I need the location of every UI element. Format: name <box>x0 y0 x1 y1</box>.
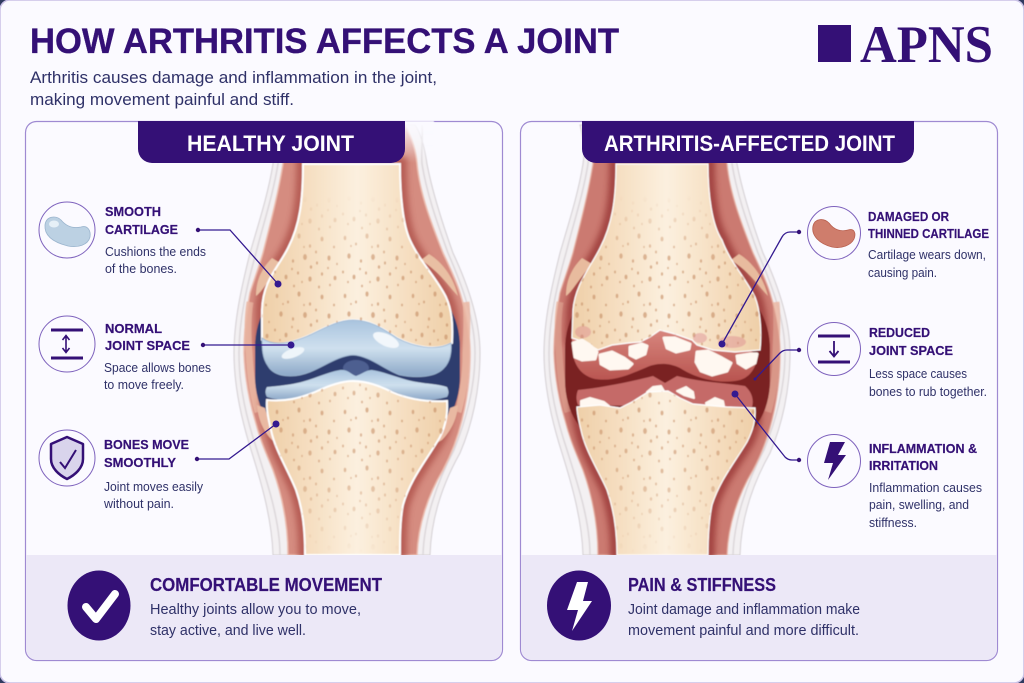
callout: smooth cartilage: SMOOTH <box>105 204 161 219</box>
subtitle: making movement painful and stiff. <box>30 91 294 109</box>
callout: damaged cartilage: Cartilage wears down, <box>868 248 986 262</box>
callout: smooth cartilage: Cushions the ends <box>105 245 206 259</box>
callout: damaged cartilage: THINNED CARTILAGE <box>868 226 989 241</box>
heading tab: arthritis-affected joint: ARTHRITIS-AFFECTED JOINT <box>604 131 895 156</box>
callout: reduced joint space <box>754 322 987 399</box>
callout: damaged cartilage: causing pain. <box>868 266 937 280</box>
callout: damaged cartilage <box>718 206 989 348</box>
callout: normal joint space: NORMAL <box>105 321 162 336</box>
callout text: comfortable movement: COMFORTABLE MOVEMENT <box>150 575 382 595</box>
heading tab: healthy joint: HEALTHY JOINT <box>187 131 354 156</box>
callout: smooth cartilage <box>39 202 282 288</box>
callout text: pain and stiffness: Joint damage and inflammation make <box>628 601 860 618</box>
callout: bones move smoothly: BONES MOVE <box>104 437 189 452</box>
subtitle: Arthritis causes damage and inflammation in the joint, <box>30 69 437 87</box>
callout: smooth cartilage: CARTILAGE <box>105 222 178 237</box>
callout text: comfortable movement <box>150 575 382 639</box>
title: HOW ARTHRITIS AFFECTS A JOINT <box>30 21 619 61</box>
icon: check circle <box>68 570 130 640</box>
callout text: comfortable movement: stay active, and live well. <box>150 622 306 639</box>
callout text: comfortable movement: Healthy joints allow you to move, <box>150 601 361 618</box>
icon: shield check <box>39 430 95 486</box>
illustration: arthritic knee joint <box>544 121 790 555</box>
callout: normal joint space: Space allows bones <box>104 361 211 375</box>
icon: lightning circle <box>547 570 611 640</box>
illustration: healthy knee joint <box>234 121 480 555</box>
heading tab: healthy joint <box>138 121 405 163</box>
icon: reduced space arrow <box>808 322 860 376</box>
logo: APNS: APNS <box>860 16 993 74</box>
callout: bones move smoothly: SMOOTHLY <box>104 455 176 470</box>
callout: inflammation and irritation <box>732 390 982 530</box>
callout: inflammation and irritation: IRRITATION <box>869 458 938 473</box>
bottom band: comfortable movement <box>26 555 502 660</box>
panel: arthritis-affected joint <box>520 121 998 660</box>
callout text: pain and stiffness: movement painful and more difficult. <box>628 622 859 639</box>
callout: reduced joint space: JOINT SPACE <box>869 343 953 358</box>
icon: blue cartilage <box>39 202 95 258</box>
callout: bones move smoothly <box>39 420 280 511</box>
icon: red cartilage <box>808 206 860 260</box>
callout: smooth cartilage: of the bones. <box>105 262 177 276</box>
callout: normal joint space: to move freely. <box>104 378 184 392</box>
callout: normal joint space: JOINT SPACE <box>105 338 190 353</box>
icon: joint space arrows <box>39 316 95 372</box>
callout: bones move smoothly: without pain. <box>103 497 174 511</box>
callout: inflammation and irritation: stiffness. <box>869 516 917 530</box>
callout: reduced joint space: bones to rub together. <box>869 385 987 399</box>
callout: damaged cartilage: DAMAGED OR <box>868 209 950 224</box>
heading tab: arthritis-affected joint <box>582 121 914 163</box>
subtitle <box>30 69 437 109</box>
callout: inflammation and irritation: Inflammation causes <box>869 481 982 495</box>
callout text: pain and stiffness <box>628 575 860 639</box>
callout: inflammation and irritation: pain, swelling, and <box>869 498 969 512</box>
callout: reduced joint space: Less space causes <box>869 367 967 381</box>
panel: healthy joint <box>26 121 502 660</box>
callout: bones move smoothly: Joint moves easily <box>104 480 204 494</box>
icon: lightning bolt <box>808 434 860 488</box>
callout: reduced joint space: REDUCED <box>869 325 930 340</box>
callout text: pain and stiffness: PAIN & STIFFNESS <box>628 575 776 595</box>
callout: normal joint space <box>39 316 294 392</box>
bottom band: pain and stiffness <box>521 555 997 660</box>
callout: inflammation and irritation: INFLAMMATION & <box>869 441 977 456</box>
